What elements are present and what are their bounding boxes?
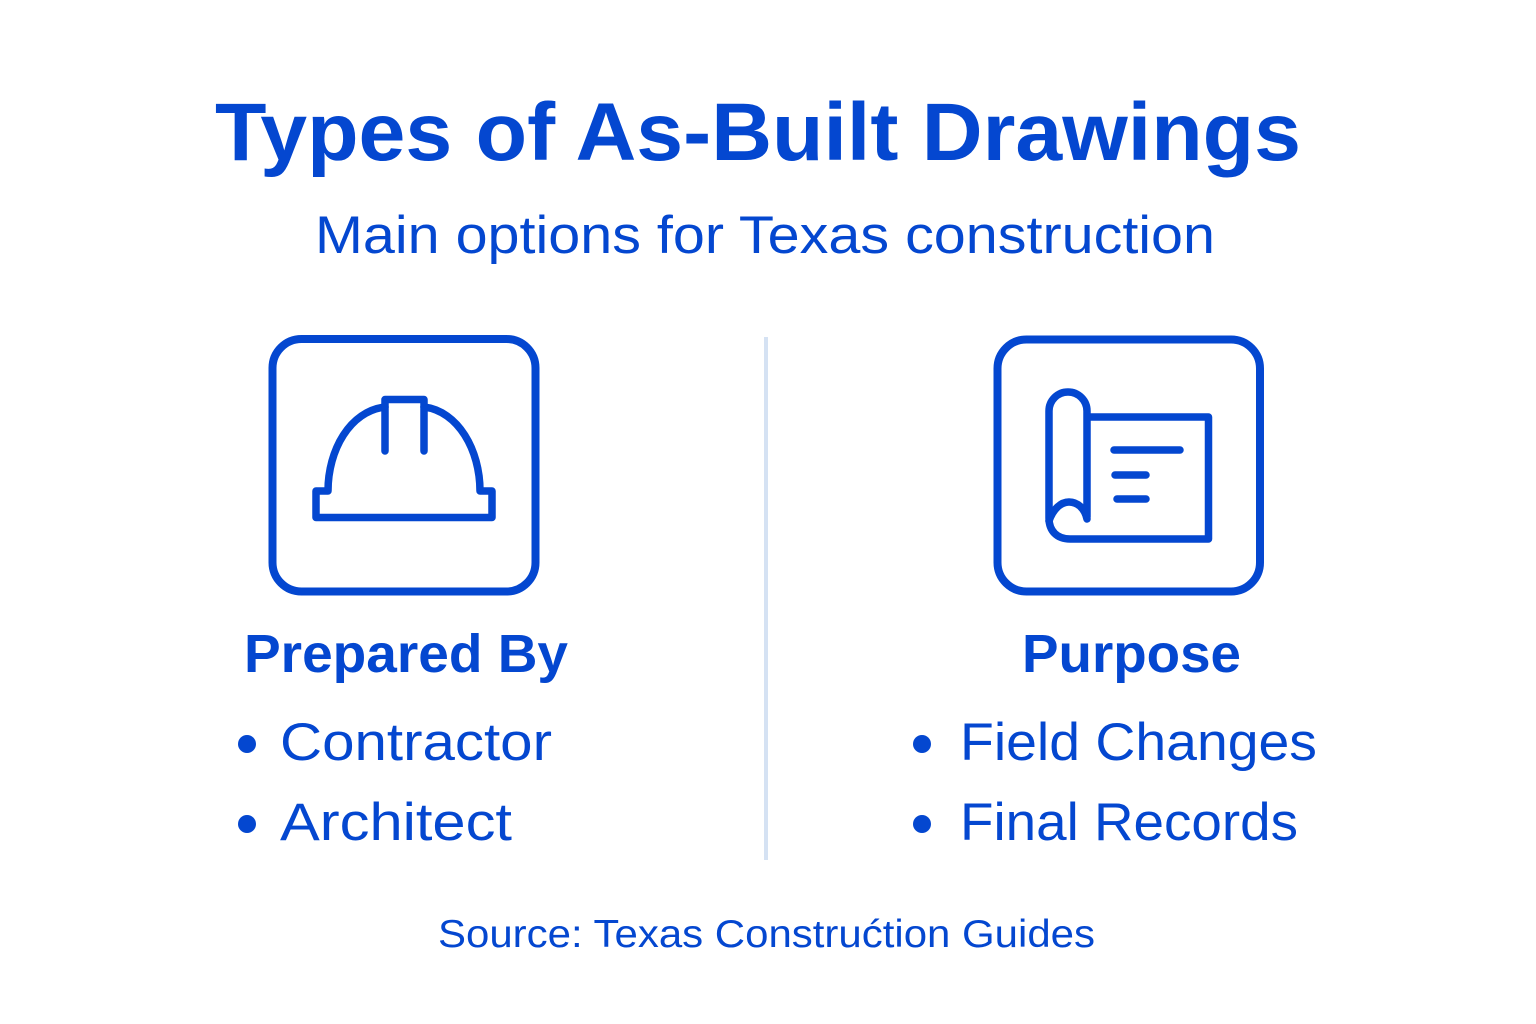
list: prepared by items: Architect [280, 793, 512, 852]
list: prepared by items [238, 713, 552, 852]
heading: purpose: Purpose [1022, 624, 1241, 684]
list: purpose items: Field Changes [960, 713, 1317, 772]
center divider [764, 337, 768, 860]
title: Types of As-Built Drawings [215, 87, 1301, 178]
list: purpose items [913, 713, 1317, 852]
panel: prepared by [238, 339, 568, 852]
source note: Source: Texas Construćtion Guides [438, 913, 1095, 956]
heading: prepared by: Prepared By [244, 624, 568, 684]
list: prepared by items: Contractor [280, 713, 552, 772]
panel: purpose [913, 340, 1317, 852]
subtitle: Main options for Texas construction [315, 206, 1215, 265]
list: purpose items: Final Records [960, 793, 1298, 852]
icon: blueprint roll [998, 340, 1260, 592]
icon: hard hat [272, 339, 536, 592]
